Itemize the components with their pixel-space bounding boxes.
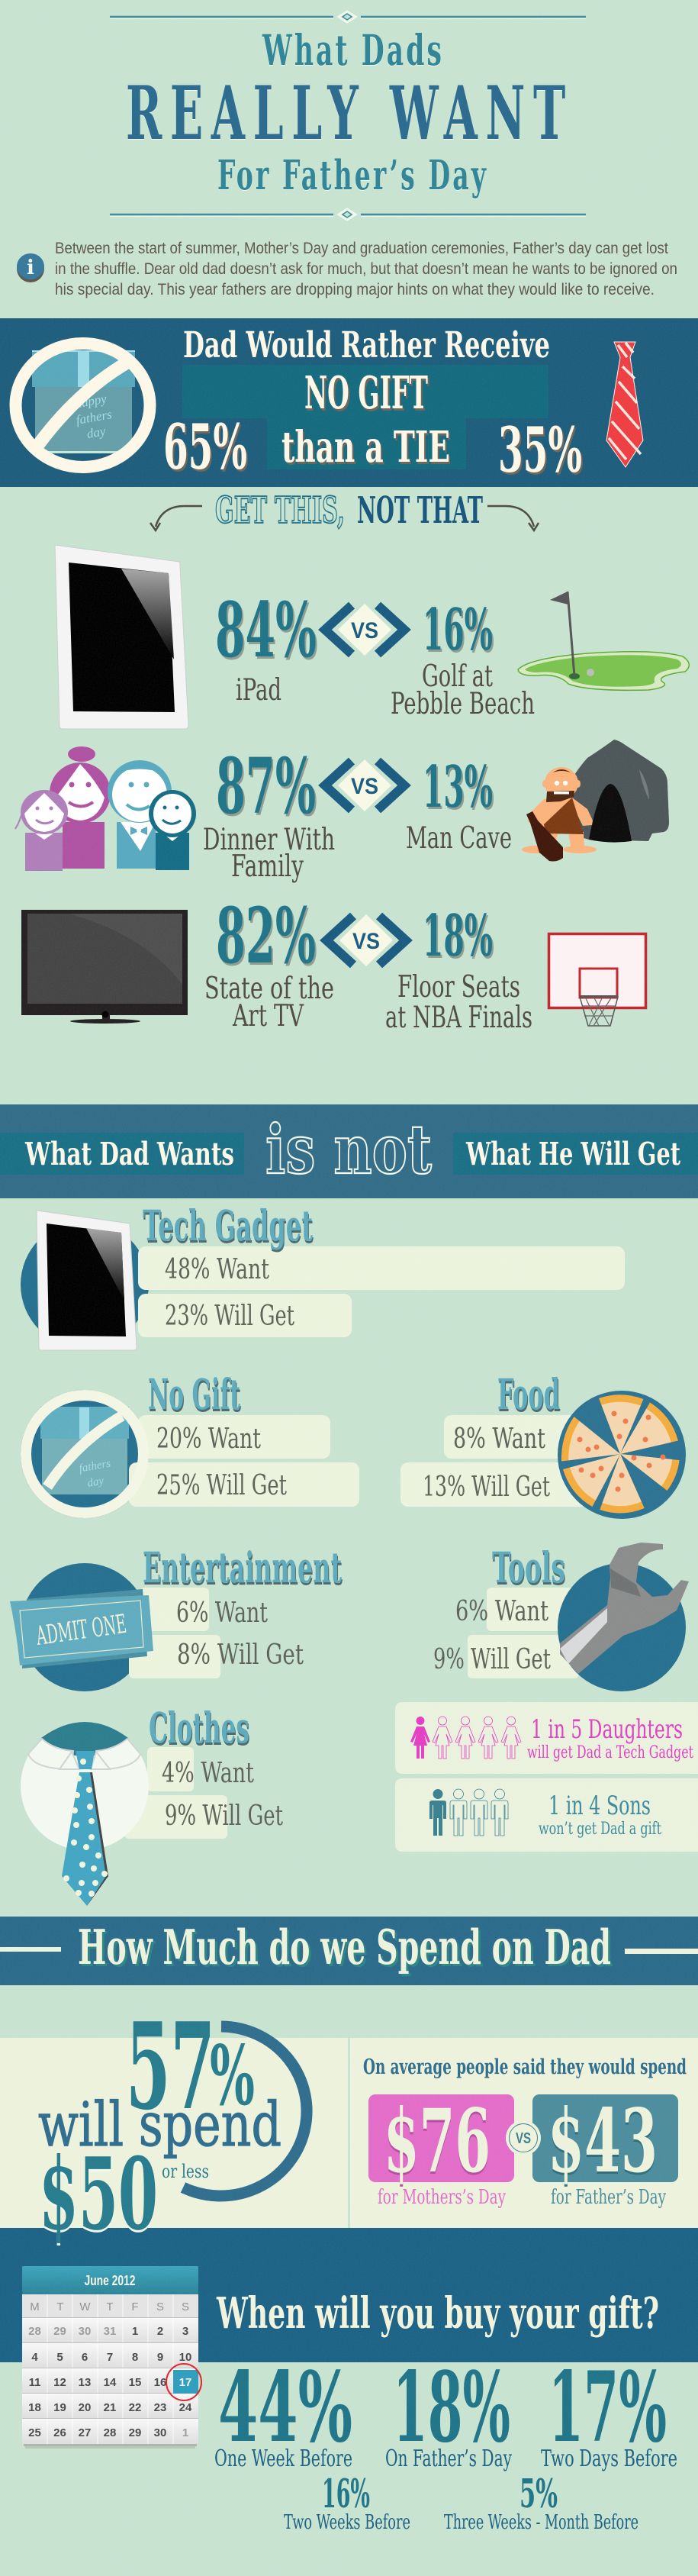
bars [129, 1415, 359, 1507]
stat on fathers day [385, 2351, 512, 2472]
band background [0, 1917, 698, 1985]
weekday row: W [79, 2300, 91, 2313]
no gift label: NO GIFT [304, 366, 428, 419]
icon: ipad [37, 1211, 137, 1350]
will get label: 23% Will Get [165, 1301, 294, 1332]
than a tie label: than a TIE [281, 422, 450, 472]
date grid: 17 [179, 2376, 191, 2389]
date grid: 28 [28, 2325, 41, 2338]
comparison row: family vs man cave [15, 740, 669, 884]
heading: Clothes [149, 1703, 249, 1752]
title line 1: What Dads [262, 25, 444, 75]
heading: No Gift [148, 1369, 240, 1419]
side rules [0, 1947, 698, 1954]
icon: crossed gift: day [86, 1475, 105, 1490]
arrow right [487, 506, 539, 530]
icon: info [17, 253, 44, 282]
date grid: 31 [104, 2325, 116, 2338]
icon: pizza [558, 1391, 686, 1519]
intro with info icon [17, 240, 677, 298]
date grid [22, 2294, 198, 2444]
band: when will you buy background [0, 2228, 698, 2362]
icon: family [15, 746, 196, 871]
band background [0, 318, 698, 487]
date grid: 1 [182, 2426, 188, 2439]
will get label: 13% Will Get [423, 1472, 550, 1503]
circle [21, 1390, 149, 1518]
stat one week [214, 2351, 352, 2472]
icon: crossed gift: fathers [75, 407, 113, 427]
date grid: 6 [82, 2351, 88, 2364]
mothers day card [368, 2090, 514, 2192]
icon: ipad [55, 545, 188, 729]
weekday row: S [182, 2300, 189, 2313]
mothers day label: for Mothers’s Day [378, 2186, 506, 2209]
stat text: 1 in 4 Sons [548, 1791, 651, 1821]
date grid: 11 [29, 2376, 40, 2389]
heading: Tools [492, 1543, 565, 1592]
icon: basketball hoop [549, 934, 645, 1026]
date grid: 4 [31, 2351, 38, 2364]
date grid: 8 [132, 2351, 138, 2364]
vs badge [326, 914, 406, 966]
label ipad: iPad [236, 673, 281, 708]
date grid: 22 [129, 2401, 141, 2414]
date grid: 24 [179, 2401, 192, 2414]
stat two weeks: 16% [322, 2471, 370, 2517]
will get label: 9% Will Get [165, 1801, 283, 1832]
want label: 20% Want [156, 1423, 261, 1455]
label golf [391, 659, 535, 721]
stat 18: 18% [423, 902, 493, 969]
page stack [24, 2443, 197, 2449]
label dinner with family: Dinner With [203, 823, 335, 857]
top ornament divider [110, 11, 586, 22]
comparison row: tv vs nba [21, 891, 645, 1035]
want label: 48% Want [165, 1254, 269, 1285]
vs circle [506, 2120, 541, 2155]
banner: what dad wants [0, 1104, 698, 1198]
heading: Entertainment [143, 1543, 342, 1592]
icon: crossed gift: day [85, 424, 107, 441]
date grid: 16 [154, 2376, 166, 2389]
category: entertainment [10, 1543, 342, 1691]
callout: daughters [395, 1702, 698, 1774]
label state of the art tv: State of the [204, 972, 334, 1006]
icon: shirt and tie [21, 1722, 149, 1906]
comparison row: ipad vs golf [55, 545, 689, 729]
will get label: 25% Will Get [156, 1470, 287, 1501]
header [22, 2266, 198, 2294]
stat three weeks: 5% [519, 2471, 558, 2517]
icon: crossed gift [15, 343, 150, 467]
stat two weeks: Two Weeks Before [284, 2511, 410, 2534]
highlight boxes [182, 365, 548, 469]
side boxes [0, 1133, 698, 1175]
stat on fathers day: 18% [393, 2351, 510, 2464]
left label: What Dad Wants [24, 1136, 234, 1172]
date grid: 13 [79, 2376, 91, 2389]
icon: red tie [606, 342, 643, 467]
bars [129, 1588, 220, 1678]
box [395, 1702, 698, 1774]
is not: is not [265, 1110, 432, 1189]
panel background [0, 2038, 698, 2228]
bars [400, 1415, 597, 1507]
label dinner with family: Family [231, 850, 304, 884]
want label: 6% Want [176, 1598, 268, 1629]
date grid: 14 [104, 2376, 117, 2389]
date grid: 2 [157, 2325, 163, 2338]
or less: or less [162, 2161, 209, 2182]
category: tools [433, 1543, 689, 1691]
date grid: 9 [157, 2351, 163, 2364]
stat 16: 16% [423, 596, 493, 663]
divider [348, 2038, 350, 2228]
weekday row: T [56, 2300, 64, 2313]
circle [21, 1220, 149, 1349]
date grid: 30 [154, 2426, 166, 2439]
icon: tv [21, 910, 188, 1024]
date grid: 3 [182, 2325, 188, 2338]
date grid: 12 [53, 2376, 66, 2389]
vs badge: VS [352, 929, 380, 954]
icon: ticket: ADMIT ONE [34, 1609, 128, 1652]
title line 3: For Father’s Day [217, 152, 488, 199]
band background [0, 1104, 698, 1198]
date grid: 20 [79, 2401, 91, 2414]
stat 57: 57 [126, 1997, 215, 2136]
heading text left: GET THIS, [215, 489, 345, 532]
label floor seats: at NBA Finals [385, 1001, 532, 1035]
weekday row: F [131, 2300, 139, 2313]
label golf: Golf at [422, 659, 493, 694]
icon: ticket [10, 1589, 153, 1668]
category: no gift [21, 1369, 359, 1518]
label dinner with family [203, 823, 335, 884]
weekday row: M [30, 2300, 40, 2313]
want label: 6% Want [455, 1596, 548, 1627]
heading: Tech Gadget [143, 1201, 313, 1250]
arrow left [150, 506, 202, 530]
stat on fathers day: On Father’s Day [385, 2445, 512, 2472]
icon: daughters row [410, 1717, 521, 1759]
get this not that heading [150, 489, 539, 532]
35 percent: 35% [498, 414, 582, 487]
will get label: 8% Will Get [177, 1639, 304, 1671]
red circle marker [166, 2364, 201, 2400]
label floor seats: Floor Seats [397, 970, 520, 1004]
label golf: Pebble Beach [391, 687, 535, 721]
stat 87: 87% [216, 741, 316, 831]
bars [468, 1588, 579, 1678]
circle [558, 1563, 686, 1691]
banner: how much do we spend [0, 1917, 698, 1985]
stat two weeks [284, 2471, 410, 2534]
date grid: 10 [179, 2351, 191, 2364]
date grid: 15 [129, 2376, 141, 2389]
stat 13: 13% [423, 753, 493, 821]
icon: golf green [518, 592, 689, 690]
vs badge [325, 604, 404, 656]
calendar [22, 2266, 201, 2449]
mothers day card: $76 [384, 2090, 491, 2192]
will spend: will spend [38, 2089, 281, 2160]
label floor seats [385, 970, 532, 1035]
want label: 8% Want [453, 1423, 545, 1455]
stat three weeks [444, 2471, 638, 2534]
vs badge [325, 759, 404, 811]
stat one week: One Week Before [214, 2445, 352, 2472]
box [395, 1778, 698, 1852]
label state of the art tv: Art TV [232, 999, 304, 1033]
icon: cave [571, 740, 669, 843]
intro paragraph [55, 240, 677, 298]
category: clothes [21, 1703, 283, 1906]
label man cave: Man Cave [406, 821, 512, 856]
icon: sons row [429, 1789, 508, 1836]
vs badge: VS [351, 774, 378, 799]
date grid: 25 [28, 2426, 41, 2439]
want label: 4% Want [162, 1758, 254, 1789]
65 percent: 65% [163, 411, 247, 484]
vs circle: VS [516, 2130, 531, 2147]
stats: when buy [214, 2351, 677, 2534]
date grid: 27 [79, 2426, 91, 2439]
will get label: 9% Will Get [433, 1644, 551, 1675]
date grid: 18 [28, 2401, 41, 2414]
stat 82: 82% [216, 891, 316, 981]
date grid: 19 [53, 2401, 66, 2414]
date grid: 7 [107, 2351, 113, 2364]
callout: sons [395, 1778, 698, 1852]
date grid: 26 [53, 2426, 66, 2439]
stat 84: 84% [215, 586, 317, 675]
stat one week: 44% [218, 2351, 352, 2464]
header block [110, 11, 586, 220]
date grid: 21 [104, 2401, 116, 2414]
bars [138, 1246, 625, 1337]
icon: crossed gift: happy [74, 392, 108, 411]
date grid: 30 [79, 2325, 91, 2338]
heading text right: NOT THAT [357, 489, 483, 532]
date grid: 28 [104, 2426, 116, 2439]
ring [183, 2026, 307, 2196]
date grid: 29 [53, 2325, 66, 2338]
bars [124, 1747, 227, 1839]
vs badge: VS [351, 618, 378, 643]
icon: crossed gift: fathers [78, 1458, 111, 1475]
category: tech gadget [21, 1201, 625, 1350]
category: food [400, 1369, 686, 1519]
percent sign: % [210, 2028, 255, 2124]
panel: no gift vs tie [0, 318, 698, 487]
date grid: 29 [129, 2426, 141, 2439]
circle [21, 1563, 149, 1691]
date grid: 5 [56, 2351, 63, 2364]
month label: June 2012 [84, 2273, 136, 2288]
icon: crossed gift [26, 1395, 143, 1513]
date grid: 23 [154, 2401, 166, 2414]
heading: Food [497, 1369, 560, 1419]
weekday row: S [156, 2300, 164, 2313]
intro paragraph: his special day. This year fathers are dropping major hints on what they would like to receive. [55, 281, 655, 298]
weekday row: T [106, 2300, 114, 2313]
bottom ornament divider [110, 209, 586, 220]
date grid: 1 [132, 2325, 138, 2338]
icon: wrench [560, 1543, 689, 1674]
label state of the art tv [204, 972, 334, 1033]
amount: $50 [39, 2136, 158, 2252]
weekday row [22, 2294, 198, 2318]
icon: caveman [522, 767, 597, 861]
icon: info: i [27, 256, 34, 279]
panel: spending [0, 1997, 698, 2252]
